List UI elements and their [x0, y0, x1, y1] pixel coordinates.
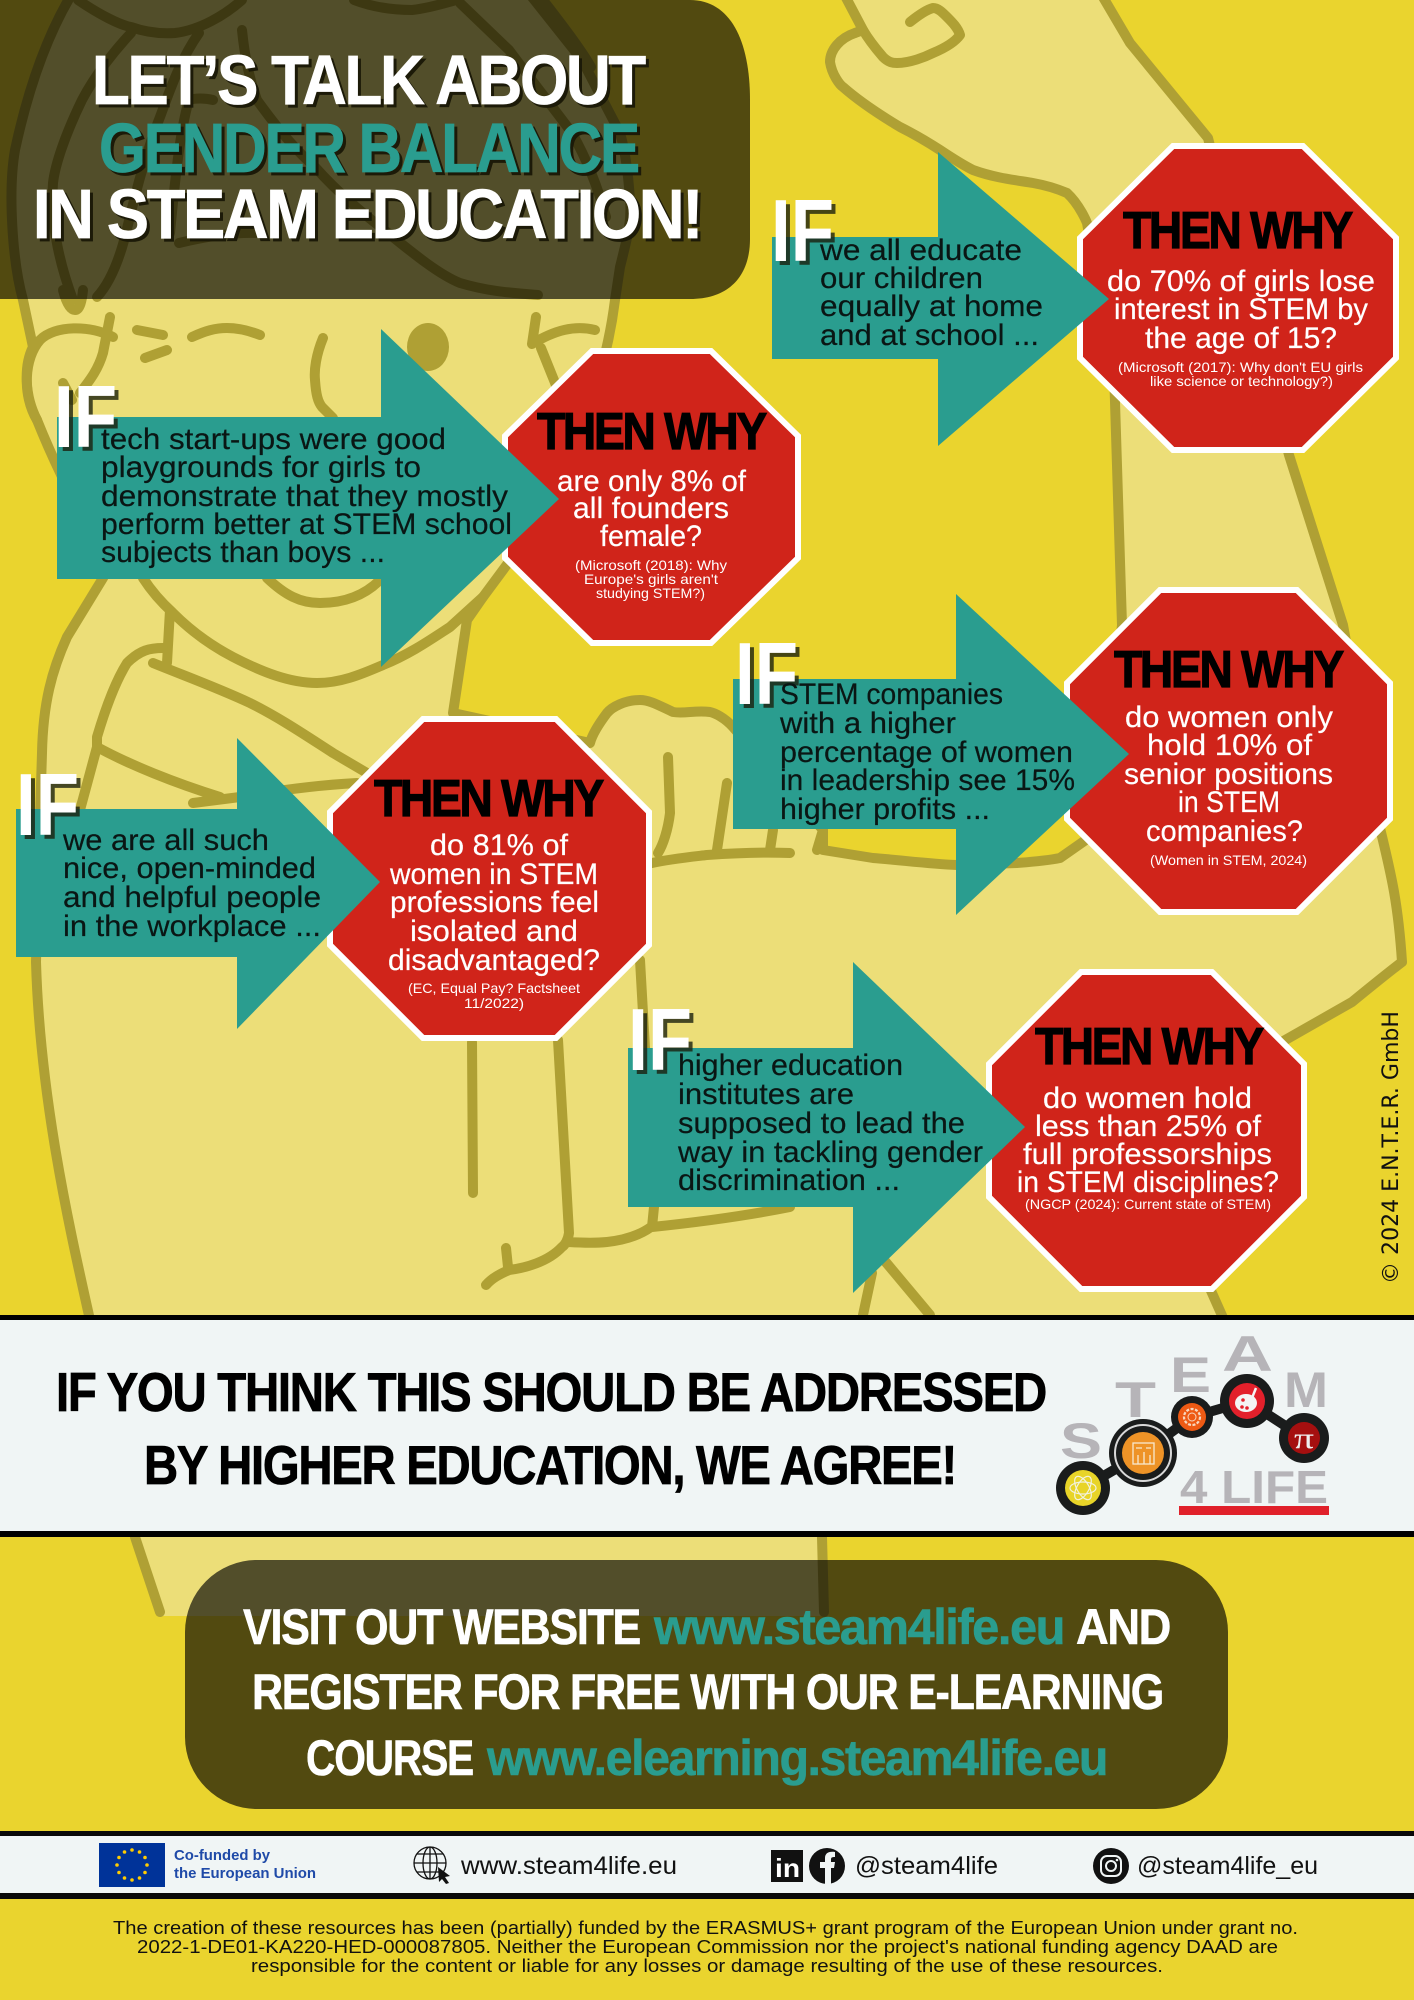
question text — [1017, 1082, 1279, 1199]
logo: STEAM 4 LIFE: π — [1294, 1422, 1314, 1455]
logo: STEAM 4 LIFE — [1056, 1326, 1329, 1515]
logo: STEAM 4 LIFE: A — [1222, 1326, 1273, 1382]
citation: 11/2022) — [464, 995, 524, 1011]
IF label: IF — [628, 990, 692, 1089]
premise text — [677, 1049, 983, 1197]
premise text: we are all such — [62, 824, 269, 857]
question text: are only 8% of — [557, 465, 747, 498]
band heading — [56, 1361, 1046, 1496]
premise text: nice, open-minded — [63, 852, 316, 885]
citation: studying STEM?) — [596, 585, 705, 601]
question text: companies? — [1146, 815, 1303, 848]
logo: STEAM 4 LIFE: T — [1115, 1372, 1156, 1428]
funding disclaimer: responsible for the content or liable for any losses or damage resulting of the use of these resources. — [251, 1955, 1163, 1976]
question text: isolated and — [410, 915, 578, 948]
thumb and forearm detail lines — [855, 8, 960, 63]
icon: LinkedIn: in — [775, 1853, 800, 1883]
funding disclaimer: 2022-1-DE01-KA220-HED-000087805. Neither the European Commission nor the project's national funding agency DAAD are — [137, 1936, 1278, 1957]
question text: the age of 15? — [1145, 322, 1337, 355]
band heading: BY HIGHER EDUCATION, WE AGREE! — [144, 1434, 956, 1496]
logo: STEAM 4 LIFE: 4 LIFE — [1180, 1461, 1328, 1513]
citation: (Microsoft (2018): Why — [575, 557, 727, 573]
then why heading: THEN WHY — [537, 403, 767, 461]
citation: (EC, Equal Pay? Factsheet — [408, 980, 580, 996]
band: contact links — [0, 1831, 1414, 1899]
premise text: way in tackling gender — [677, 1136, 983, 1169]
premise text: percentage of women — [780, 736, 1073, 769]
icon: Instagram — [1093, 1848, 1129, 1884]
icon: Facebook — [809, 1848, 845, 1884]
block: stop sign 25% professorships — [628, 962, 1304, 1293]
arrow — [628, 962, 1025, 1293]
background illustration: woman flexing arm — [12, 0, 1402, 1616]
ear and eye lines — [27, 317, 113, 420]
block: stop sign 8% founders — [54, 329, 798, 667]
question text: full professorships — [1023, 1138, 1272, 1171]
IF label: IF — [735, 624, 798, 723]
premise text — [101, 423, 512, 569]
icon: LinkedIn — [771, 1850, 803, 1883]
citation — [1118, 359, 1363, 389]
logo: STEAM 4 LIFE: M — [1284, 1362, 1328, 1418]
question text: hold 10% of — [1147, 729, 1313, 762]
question text — [1124, 701, 1333, 848]
premise text: subjects than boys ... — [101, 536, 385, 569]
premise text: and helpful people — [63, 881, 321, 914]
co-funded text: Co-funded by — [174, 1847, 271, 1864]
question text: all founders — [573, 492, 729, 525]
question text: professions feel — [390, 886, 599, 919]
question text — [1107, 265, 1375, 355]
jaw and neck lines — [143, 578, 483, 683]
block: stop sign 70% of girls — [771, 146, 1396, 450]
premise text: demonstrate that they mostly — [101, 480, 508, 513]
website link: www.steam4life.eu — [460, 1852, 677, 1880]
band heading: IF YOU THINK THIS SHOULD BE ADDRESSED — [56, 1361, 1046, 1423]
logo: STEAM 4 LIFE: S — [1060, 1413, 1102, 1469]
premise text: higher education — [678, 1049, 903, 1082]
linkedin and facebook handle: @steam4life — [855, 1852, 998, 1880]
question text: female? — [600, 520, 702, 553]
block: stop sign 81% of women — [16, 719, 649, 1038]
co-funded text — [174, 1847, 316, 1882]
premise text — [819, 234, 1043, 352]
premise text: equally at home — [820, 290, 1043, 323]
question text: do 70% of girls lose — [1107, 265, 1375, 298]
copyright note: © 2024 E.N.T.E.R. GmbH — [1379, 1011, 1404, 1284]
premise text — [62, 824, 321, 943]
IF label: IF — [16, 755, 79, 854]
citation — [575, 557, 727, 601]
premise text: supposed to lead the — [678, 1107, 965, 1140]
band: call to agreement — [0, 1315, 1414, 1537]
citation: Europe's girls aren't — [584, 571, 718, 587]
title text: LET’S TALK ABOUT — [92, 41, 646, 119]
then why heading: THEN WHY — [374, 770, 604, 828]
premise text: in leadership see 15% — [780, 764, 1075, 797]
invitation text — [243, 1599, 1170, 1786]
logo: STEAM 4 LIFE: E — [1170, 1347, 1211, 1403]
invitation text: REGISTER FOR FREE WITH OUR E-LEARNING — [252, 1664, 1163, 1720]
question text: do women only — [1125, 701, 1333, 734]
premise text: we all educate — [819, 234, 1022, 267]
premise text: higher profits ... — [780, 793, 990, 826]
arrow — [16, 738, 380, 1029]
question text: do women hold — [1043, 1082, 1252, 1115]
question text: interest in STEM by — [1114, 293, 1368, 326]
citation: like science or technology?) — [1150, 373, 1333, 389]
arrow — [733, 594, 1129, 915]
premise text: discrimination ... — [678, 1164, 900, 1197]
arrow — [772, 152, 1109, 446]
panel: website invitation — [185, 1560, 1228, 1809]
premise text: STEM companies — [780, 678, 1003, 711]
IF label: IF — [771, 181, 834, 280]
premise text: playgrounds for girls to — [101, 451, 421, 484]
premise text: and at school ... — [820, 319, 1039, 352]
invitation text: www.elearning.steam4life.eu — [486, 1730, 1107, 1786]
question text: disadvantaged? — [388, 944, 600, 977]
question text — [557, 465, 747, 553]
then why heading: THEN WHY — [1123, 202, 1353, 260]
title text — [33, 41, 701, 253]
EU flag — [99, 1843, 165, 1887]
arrow — [57, 329, 559, 667]
invitation text: VISIT OUT WEBSITE — [243, 1599, 640, 1655]
then why heading: THEN WHY — [1114, 641, 1344, 699]
citation: (NGCP (2024): Current state of STEM) — [1025, 1196, 1271, 1212]
invitation text: www.steam4life.eu — [653, 1599, 1064, 1655]
title text: GENDER BALANCE — [99, 109, 638, 187]
co-funded text: the European Union — [174, 1865, 316, 1882]
question text — [388, 829, 600, 977]
title text: IN STEAM EDUCATION! — [33, 175, 701, 253]
then why heading: THEN WHY — [1035, 1018, 1264, 1076]
citation: (Microsoft (2017): Why don't EU girls — [1118, 359, 1363, 375]
question text: less than 25% of — [1035, 1110, 1262, 1143]
premise text: in the workplace ... — [63, 910, 321, 943]
premise text — [779, 678, 1075, 826]
premise text: perform better at STEM school — [101, 508, 512, 541]
lower arm lines — [472, 960, 930, 1315]
funding disclaimer: The creation of these resources has been (partially) funded by the ERASMUS+ grant program of the European Union under grant no. — [113, 1917, 1298, 1938]
title panel — [0, 0, 750, 299]
icon: globe with cursor — [414, 1847, 450, 1884]
question text: do 81% of — [430, 829, 569, 862]
invitation text: AND — [1076, 1599, 1170, 1655]
invitation text: COURSE — [306, 1730, 473, 1786]
IF label: IF — [54, 367, 117, 466]
question text: in STEM disciplines? — [1017, 1166, 1279, 1199]
question text: women in STEM — [389, 858, 598, 891]
citation: (Women in STEM, 2024) — [1150, 852, 1307, 868]
fist and arm lines — [658, 757, 823, 853]
premise text: our children — [820, 262, 983, 295]
premise text: institutes are — [678, 1078, 854, 1111]
instagram handle: @steam4life_eu — [1137, 1852, 1318, 1880]
funding disclaimer — [113, 1917, 1298, 1976]
block: stop sign 10% senior positions — [733, 590, 1390, 915]
hair lines — [52, 0, 606, 300]
premise text: with a higher — [779, 707, 956, 740]
question text: in STEM — [1178, 786, 1280, 819]
question text: senior positions — [1124, 758, 1333, 791]
citation — [408, 980, 580, 1011]
premise text: tech start-ups were good — [101, 423, 446, 456]
